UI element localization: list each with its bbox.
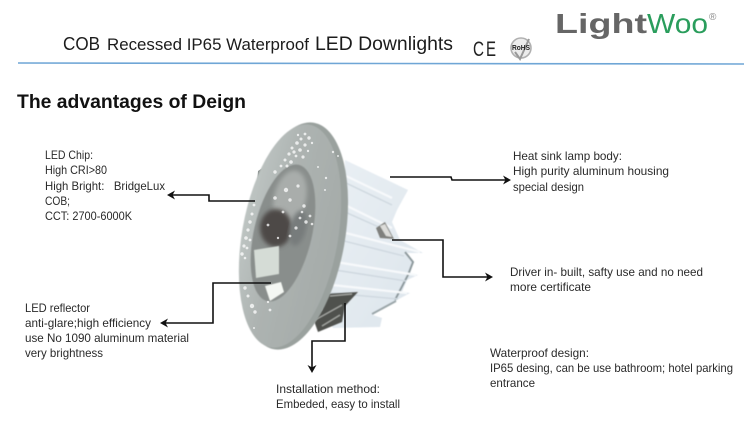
arrow: installation [312, 303, 345, 371]
callout: installation: Embeded, easy to install [276, 397, 400, 411]
callout: LED chip: High CRI>80 [45, 163, 107, 177]
driver bracket [376, 222, 394, 239]
icon: RoHS mark [511, 38, 531, 59]
water droplets [240, 133, 339, 329]
header rule [18, 63, 744, 64]
callout: installation [276, 382, 400, 411]
arrow: driver [392, 240, 491, 277]
callout: LED reflector: very brightness [25, 346, 103, 360]
icon: CE mark: C [473, 38, 484, 61]
title: Recessed IP65 Waterproof [107, 35, 309, 54]
title [63, 33, 453, 55]
arrow: heat sink [390, 177, 509, 180]
heading: The advantages of Deign [17, 91, 246, 113]
callout: heat sink: special design [513, 180, 584, 194]
callout: heat sink: Heat sink lamp body: [513, 149, 622, 163]
callout: heat sink: High purity aluminum housing [513, 164, 669, 178]
callout: LED chip: CCT: 2700-6000K [45, 209, 132, 223]
logo: LightWoo: Woo [647, 8, 708, 39]
callout: waterproof: Waterproof design: [490, 346, 589, 360]
icon: RoHS mark: RoHS [512, 43, 530, 52]
logo: LightWoo [555, 8, 717, 39]
callout: LED reflector: use No 1090 aluminum material [25, 331, 189, 345]
title: COB [63, 33, 100, 54]
reflector opening [239, 158, 327, 308]
callout: driver: Driver in- built, safty use and no need [510, 265, 703, 279]
lamp illustration [223, 114, 423, 358]
arrow: LED chip [169, 195, 255, 201]
lamp body heat sink [318, 160, 423, 328]
callout: waterproof [490, 346, 733, 390]
callout: LED chip: High Bright: BridgeLux [45, 179, 165, 193]
callout: LED chip [45, 148, 165, 223]
callout: LED reflector [25, 301, 189, 360]
callout: LED chip: LED Chip: [45, 148, 93, 162]
callout: driver [510, 265, 703, 294]
logo: LightWoo: ® [709, 12, 717, 23]
callout: waterproof: IP65 desing, can be use bathroom; hotel parking [490, 361, 733, 375]
callout: LED reflector: anti-glare;high efficiency [25, 316, 151, 330]
callout: waterproof: entrance [490, 376, 535, 390]
icon: CE mark: E [486, 38, 496, 61]
flange ring [223, 114, 364, 358]
title: LED Downlights [315, 34, 453, 55]
arrow: LED reflector [162, 283, 271, 323]
callout: LED chip: COB; [45, 194, 70, 208]
flange tab [257, 167, 266, 183]
icon: CE mark [473, 38, 496, 61]
callout: LED reflector: LED reflector [25, 301, 90, 315]
spring clip [313, 292, 358, 332]
logo: LightWoo: Light [555, 8, 647, 39]
callout: heat sink [513, 149, 669, 194]
callout: installation: Installation method: [276, 382, 380, 396]
callout: driver: more certificate [510, 280, 591, 294]
